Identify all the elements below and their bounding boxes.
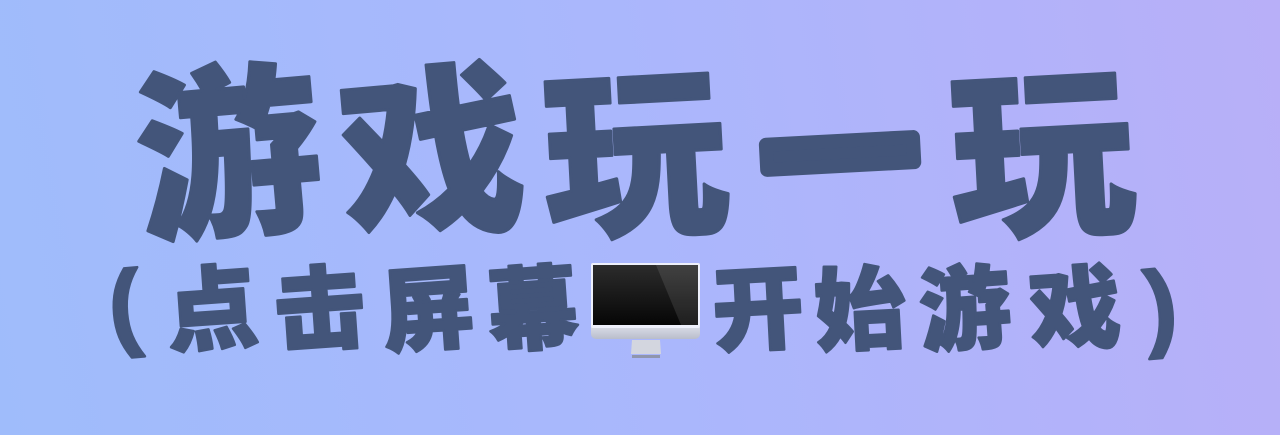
subtitle: ) (1140, 251, 1181, 360)
subtitle: 戏 (1026, 258, 1124, 365)
subtitle: 点 (163, 258, 261, 365)
title (128, 46, 1140, 268)
subtitle (104, 251, 1181, 365)
title: 游 (128, 46, 329, 268)
subtitle: 开 (710, 259, 806, 364)
subtitle: 始 (812, 259, 908, 364)
subtitle: 屏 (379, 258, 477, 365)
title: 玩 (538, 49, 733, 265)
title: 戏 (332, 46, 533, 268)
subtitle: ( (104, 251, 145, 360)
title: 玩 (945, 49, 1140, 265)
subtitle: 幕 (484, 258, 582, 365)
subtitle: 击 (271, 258, 369, 365)
icon: desktop monitor (591, 263, 700, 358)
title: 一 (757, 69, 924, 253)
subtitle: 游 (916, 258, 1014, 365)
